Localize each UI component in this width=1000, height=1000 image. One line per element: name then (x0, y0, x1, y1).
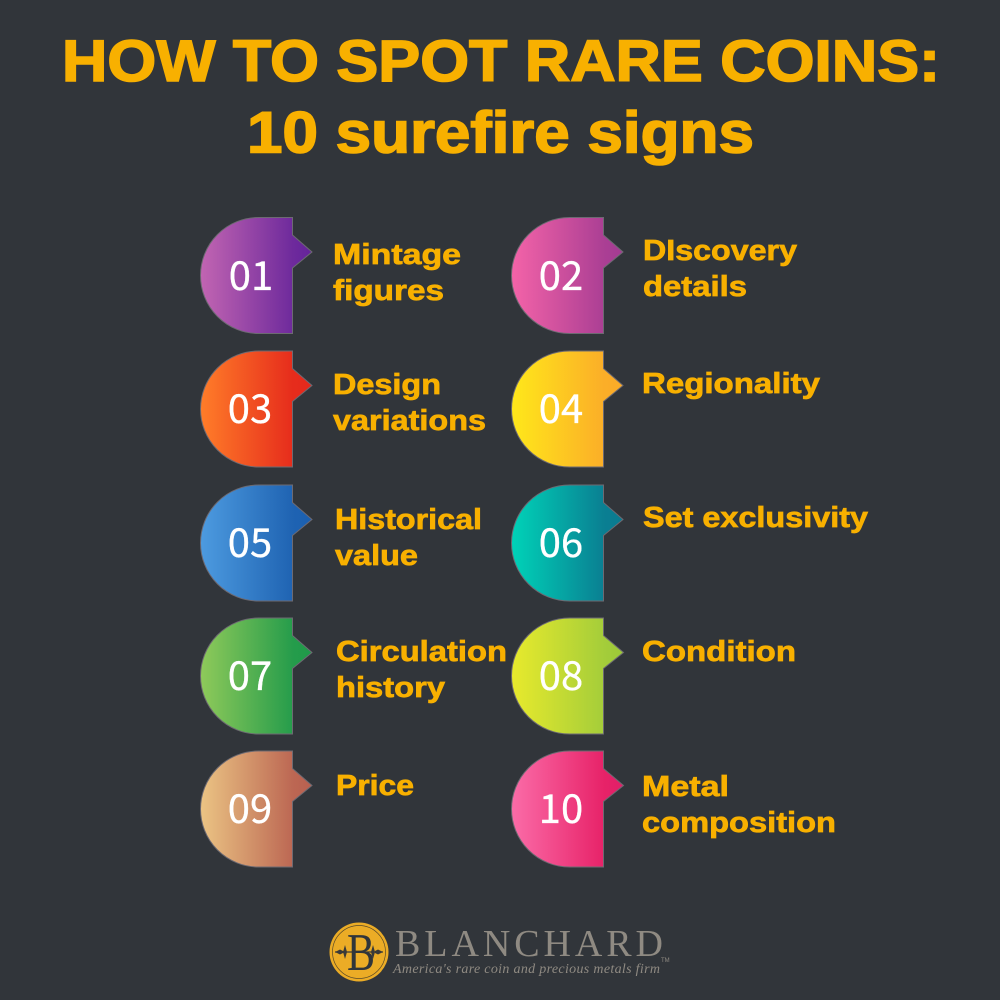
item 10: Metal composition: Metal (642, 771, 729, 803)
item 02: Discovery details: DIscovery (643, 235, 797, 267)
trademark: TM (661, 958, 670, 964)
item 06: Set exclusivity: 06 (539, 511, 583, 569)
item 04: Regionality (512, 351, 820, 467)
item 07: Circulation history: history (336, 672, 445, 704)
item 01: Mintage figures (200, 218, 461, 334)
item 03: Design variations: Design (333, 369, 441, 401)
title: HOW TO SPOT RARE COINS: (62, 29, 940, 94)
title: 10 surefire signs (247, 100, 754, 166)
item 10: Metal composition (512, 751, 836, 867)
item 07: Circulation history (200, 618, 507, 734)
icon: gold B medallion: B (347, 924, 375, 982)
item 05: Historical value: 05 (228, 511, 272, 569)
item 01: Mintage figures: 01 (229, 244, 273, 302)
item 01: Mintage figures: figures (333, 275, 444, 307)
item 05: Historical value (200, 485, 482, 601)
item 04: Regionality: Regionality (642, 368, 820, 400)
tagline: America's rare coin and precious metals firm (392, 962, 660, 977)
item 05: Historical value: Historical (335, 504, 482, 536)
item 03: Design variations (200, 351, 486, 467)
item 07: Circulation history: 07 (228, 644, 272, 702)
item 06: Set exclusivity: Set exclusivity (643, 502, 868, 534)
item 08: Condition: 08 (539, 644, 583, 702)
item 10: Metal composition: composition (642, 807, 836, 839)
item 10: Metal composition: 10 (539, 777, 583, 835)
item 09: Price (200, 751, 414, 867)
item 08: Condition: Condition (642, 636, 796, 668)
item 03: Design variations: variations (333, 405, 486, 437)
item 06: Set exclusivity (512, 485, 868, 601)
title (62, 29, 940, 166)
item 02: Discovery details: 02 (539, 244, 583, 302)
item 02: Discovery details: details (643, 271, 747, 303)
item 07: Circulation history: Circulation (336, 636, 507, 668)
item 05: Historical value: value (335, 540, 418, 572)
item 09: Price: Price (336, 770, 414, 802)
item 03: Design variations: 03 (228, 377, 272, 435)
item 02: Discovery details (512, 218, 797, 334)
item 04: Regionality: 04 (539, 377, 583, 435)
item 01: Mintage figures: Mintage (333, 239, 461, 271)
wordmark: BLANCHARD (395, 923, 663, 965)
item 08: Condition (512, 618, 796, 734)
icon: gold B medallion (330, 922, 388, 982)
item 09: Price: 09 (228, 777, 272, 835)
logo: Blanchard (330, 922, 670, 982)
